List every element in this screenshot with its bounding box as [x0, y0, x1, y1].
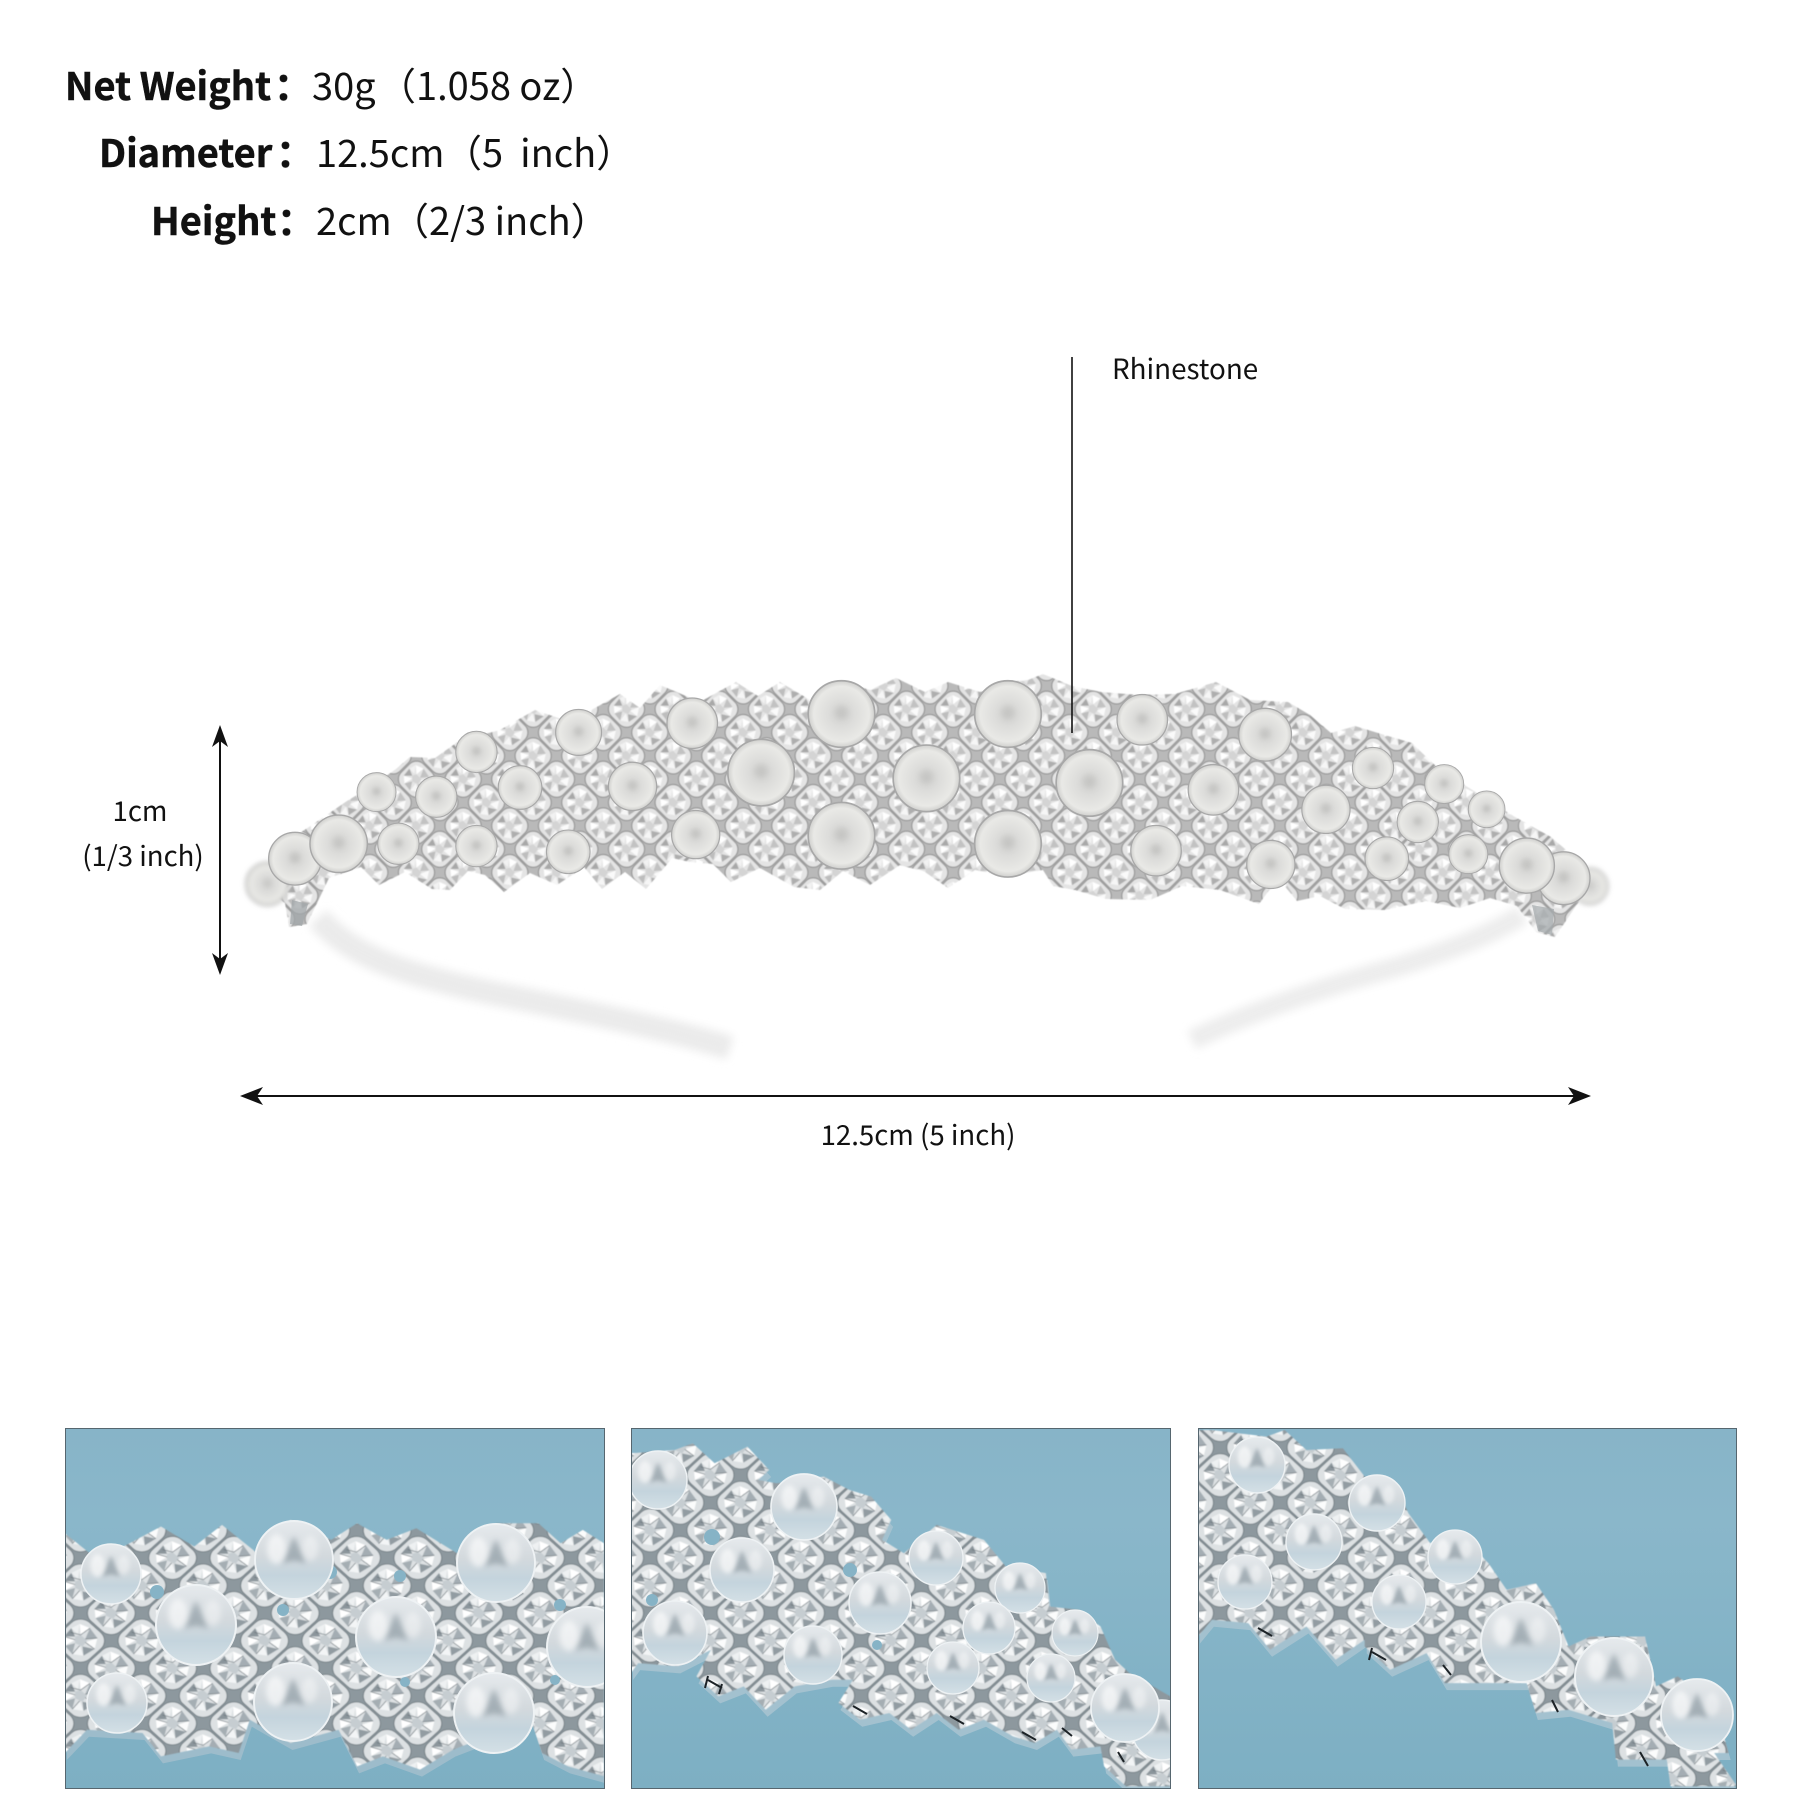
- net weight line: Net Weight: [65, 56, 271, 111]
- height line: （2/3 inch）: [391, 191, 609, 246]
- silver setting shadow panel 3: [1200, 1620, 1736, 1788]
- width arrow: [240, 1087, 1591, 1105]
- pearls panel 3: [1218, 1437, 1733, 1751]
- clasp right: [1532, 905, 1554, 935]
- silver setting shadow panel 1: [67, 1527, 606, 1783]
- height label: [82, 789, 204, 874]
- diameter line: Diameter: [99, 123, 273, 178]
- panel 1 border: [66, 1428, 604, 1788]
- faint headband wire right: [1192, 915, 1522, 1040]
- pearls panel 2: [629, 1451, 1192, 1760]
- gaps panel 1: [150, 1565, 566, 1687]
- pearls panel 1: [81, 1521, 627, 1753]
- height line: 2cm: [316, 191, 392, 246]
- height arrow: [212, 725, 228, 975]
- clasp left: [290, 900, 308, 926]
- headband rhinestone body: [268, 674, 1585, 937]
- specifications text block: [65, 56, 634, 246]
- rhinestones panel 1: [65, 1520, 604, 1776]
- silver setting shadow panel 2: [633, 1450, 1172, 1793]
- height line: Height: [151, 191, 276, 246]
- rhinestones panel 2: [631, 1443, 1170, 1786]
- net weight line: ：: [274, 56, 312, 111]
- height line: ：: [277, 191, 315, 246]
- setting marks panel 3: [1258, 1628, 1648, 1766]
- gaps panel 2: [646, 1529, 882, 1650]
- panel: straight centre detail photo: [65, 1428, 627, 1788]
- width label: 12.5cm (5 inch): [821, 1113, 1015, 1153]
- net weight line: 30g: [312, 56, 376, 111]
- panel 2 border: [632, 1428, 1170, 1788]
- net weight line: （1.058 oz）: [378, 56, 598, 111]
- diameter line: [99, 123, 634, 178]
- panel: left curve detail photo: [629, 1428, 1192, 1793]
- diameter line: （5 inch）: [444, 123, 634, 178]
- faint headband wire left: [318, 918, 730, 1048]
- setting marks panel 2: [705, 1676, 1124, 1762]
- height line: [151, 191, 609, 246]
- height label: (1/3 inch): [82, 834, 204, 874]
- pearls on headband: [246, 681, 1608, 906]
- rhinestones panel 3: [1198, 1430, 1737, 1786]
- diameter line: ：: [276, 123, 314, 178]
- panel 3 border: [1198, 1428, 1736, 1788]
- net weight line: [65, 56, 598, 111]
- diameter line: 12.5cm: [316, 123, 444, 178]
- rhinestone callout label: Rhinestone: [1112, 348, 1258, 388]
- height label: 1cm: [113, 789, 167, 829]
- rhinestone leader line: [1071, 357, 1073, 733]
- panel: right end detail photo: [1198, 1428, 1739, 1793]
